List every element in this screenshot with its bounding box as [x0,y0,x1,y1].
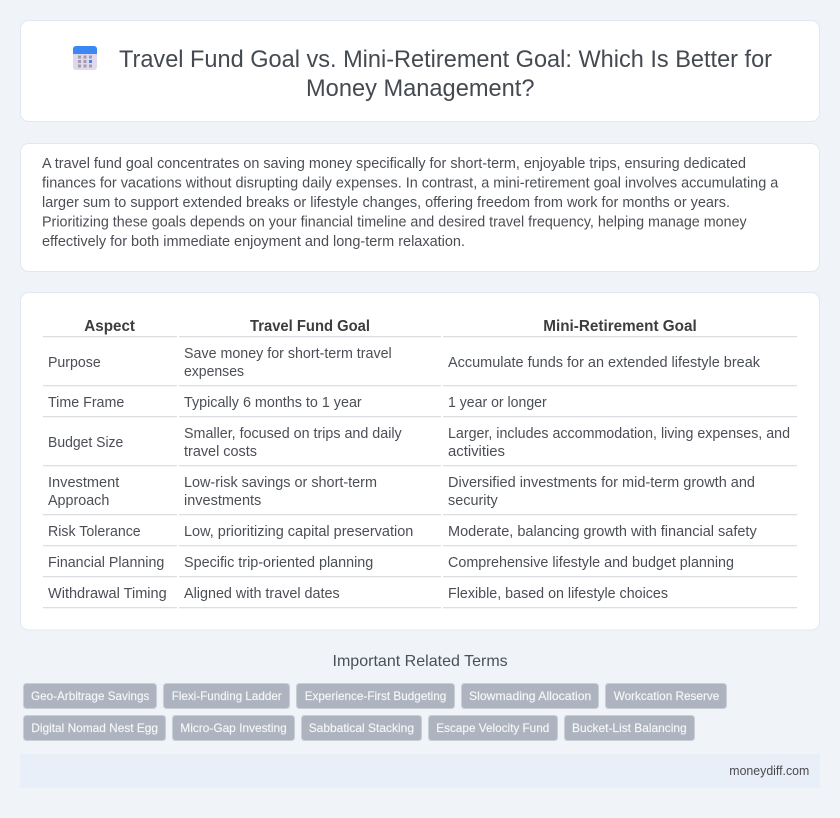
table row: Withdrawal Timing: Aligned with travel dates [184,586,340,602]
tag: Geo-Arbitrage Savings: Geo-Arbitrage Savings [31,689,149,703]
table row: Financial Planning: Specific trip-oriented planning [184,555,373,571]
tag: Experience-First Budgeting: Experience-First Budgeting [305,689,446,703]
table row: Investment Approach: Diversified investments for mid-term growth and [448,475,755,491]
table header row [43,318,797,337]
tag: Flexi-Funding Ladder: Flexi-Funding Ladder [172,689,282,703]
table row: Budget Size: activities [448,444,505,460]
table row: Time Frame [43,395,797,417]
table row: Purpose [43,346,797,386]
table header row: Mini-Retirement Goal [543,318,697,335]
panel: title header [20,20,820,122]
table row: Budget Size: travel costs [184,444,257,460]
table row: Financial Planning [43,555,797,577]
tag: Slowmading Allocation [462,684,598,708]
table row: Investment Approach: Low-risk savings or short-term [184,475,377,491]
title: Travel Fund Goal vs. Mini-Retirement Goal: Which Is Better for [119,46,772,73]
table row: Purpose: Accumulate funds for an extended lifestyle break [448,355,761,371]
title: Money Management? [306,75,534,102]
table row: Investment Approach: security [448,493,498,509]
tag: Flexi-Funding Ladder [164,684,290,708]
table row: Time Frame: Typically 6 months to 1 year [184,395,362,411]
table row: Investment Approach: investments [184,493,261,509]
text block: introduction paragraph: larger sum to support extended breaks or lifestyle changes, offering freedom from work for months or years. [42,195,730,211]
table row: Time Frame: Time Frame [48,395,124,411]
table row: Investment Approach [43,475,797,515]
tag: Sabbatical Stacking [302,716,422,740]
table row: Purpose: expenses [184,364,244,380]
table row: Withdrawal Timing: Withdrawal Timing [48,586,167,602]
tag: Workcation Reserve: Workcation Reserve [614,689,720,703]
tag: Bucket-List Balancing: Bucket-List Balancing [572,721,687,735]
footer source text: moneydiff.com [729,763,809,778]
heading: important related terms: Important Related Terms [332,653,508,670]
panel: introduction [20,144,820,272]
related terms tags [24,684,726,740]
tag: Geo-Arbitrage Savings [24,684,156,708]
icon: calendar [73,46,97,70]
table row: Financial Planning: Comprehensive lifestyle and budget planning [448,555,734,571]
table row: Purpose: Save money for short-term travel [184,346,392,362]
table row: Financial Planning: Financial Planning [48,555,164,571]
title [119,46,772,102]
tag: Sabbatical Stacking: Sabbatical Stacking [309,721,414,735]
table row: Risk Tolerance: Low, prioritizing capital preservation [184,524,413,540]
table row: Purpose: Purpose [48,355,101,371]
table row: Withdrawal Timing [43,586,797,608]
text block: introduction paragraph [42,156,778,250]
text block: introduction paragraph: effectively for both immediate enjoyment and long-term relaxation. [42,234,465,250]
table row: Investment Approach: Investment [48,475,119,491]
tag: Micro-Gap Investing: Micro-Gap Investing [180,721,287,735]
text block: introduction paragraph: Prioritizing these goals depends on your financial timeline and desired travel frequency, helping manage money [42,214,747,230]
table row: Budget Size: Larger, includes accommodation, living expenses, and [448,426,790,442]
panel: comparison table [20,292,820,630]
tag: Micro-Gap Investing [172,716,294,740]
table row: Budget Size: Budget Size [48,435,123,451]
table row: Risk Tolerance: Risk Tolerance [48,524,141,540]
tag: Experience-First Budgeting [296,684,454,708]
tag: Bucket-List Balancing [564,716,694,740]
table header row: Travel Fund Goal [250,318,370,335]
table row: Budget Size [43,426,797,466]
table row: Investment Approach: Approach [48,493,109,509]
table row: Budget Size: Smaller, focused on trips and daily [184,426,402,442]
table row: Risk Tolerance: Moderate, balancing growth with financial safety [448,524,758,540]
table row: Risk Tolerance [43,524,797,546]
table header row: Aspect [84,318,136,335]
tag: Workcation Reserve [606,684,726,708]
tag: Slowmading Allocation: Slowmading Allocation [469,689,591,703]
table row: Time Frame: 1 year or longer [448,395,547,411]
tag: Escape Velocity Fund [428,716,558,740]
text block: introduction paragraph: A travel fund goal concentrates on saving money specifically for short-term, enjoyable trips, ensuring dedicated [42,156,746,172]
table row: Withdrawal Timing: Flexible, based on lifestyle choices [448,586,668,602]
tag: Digital Nomad Nest Egg [24,716,166,740]
text block: introduction paragraph: finances for vacations without disrupting daily expenses. In contrast, a mini-retirement goal involves accumulating a [42,176,778,192]
tag: Digital Nomad Nest Egg: Digital Nomad Nest Egg [31,721,158,735]
footer band [20,754,820,788]
tag: Escape Velocity Fund: Escape Velocity Fund [436,721,549,735]
